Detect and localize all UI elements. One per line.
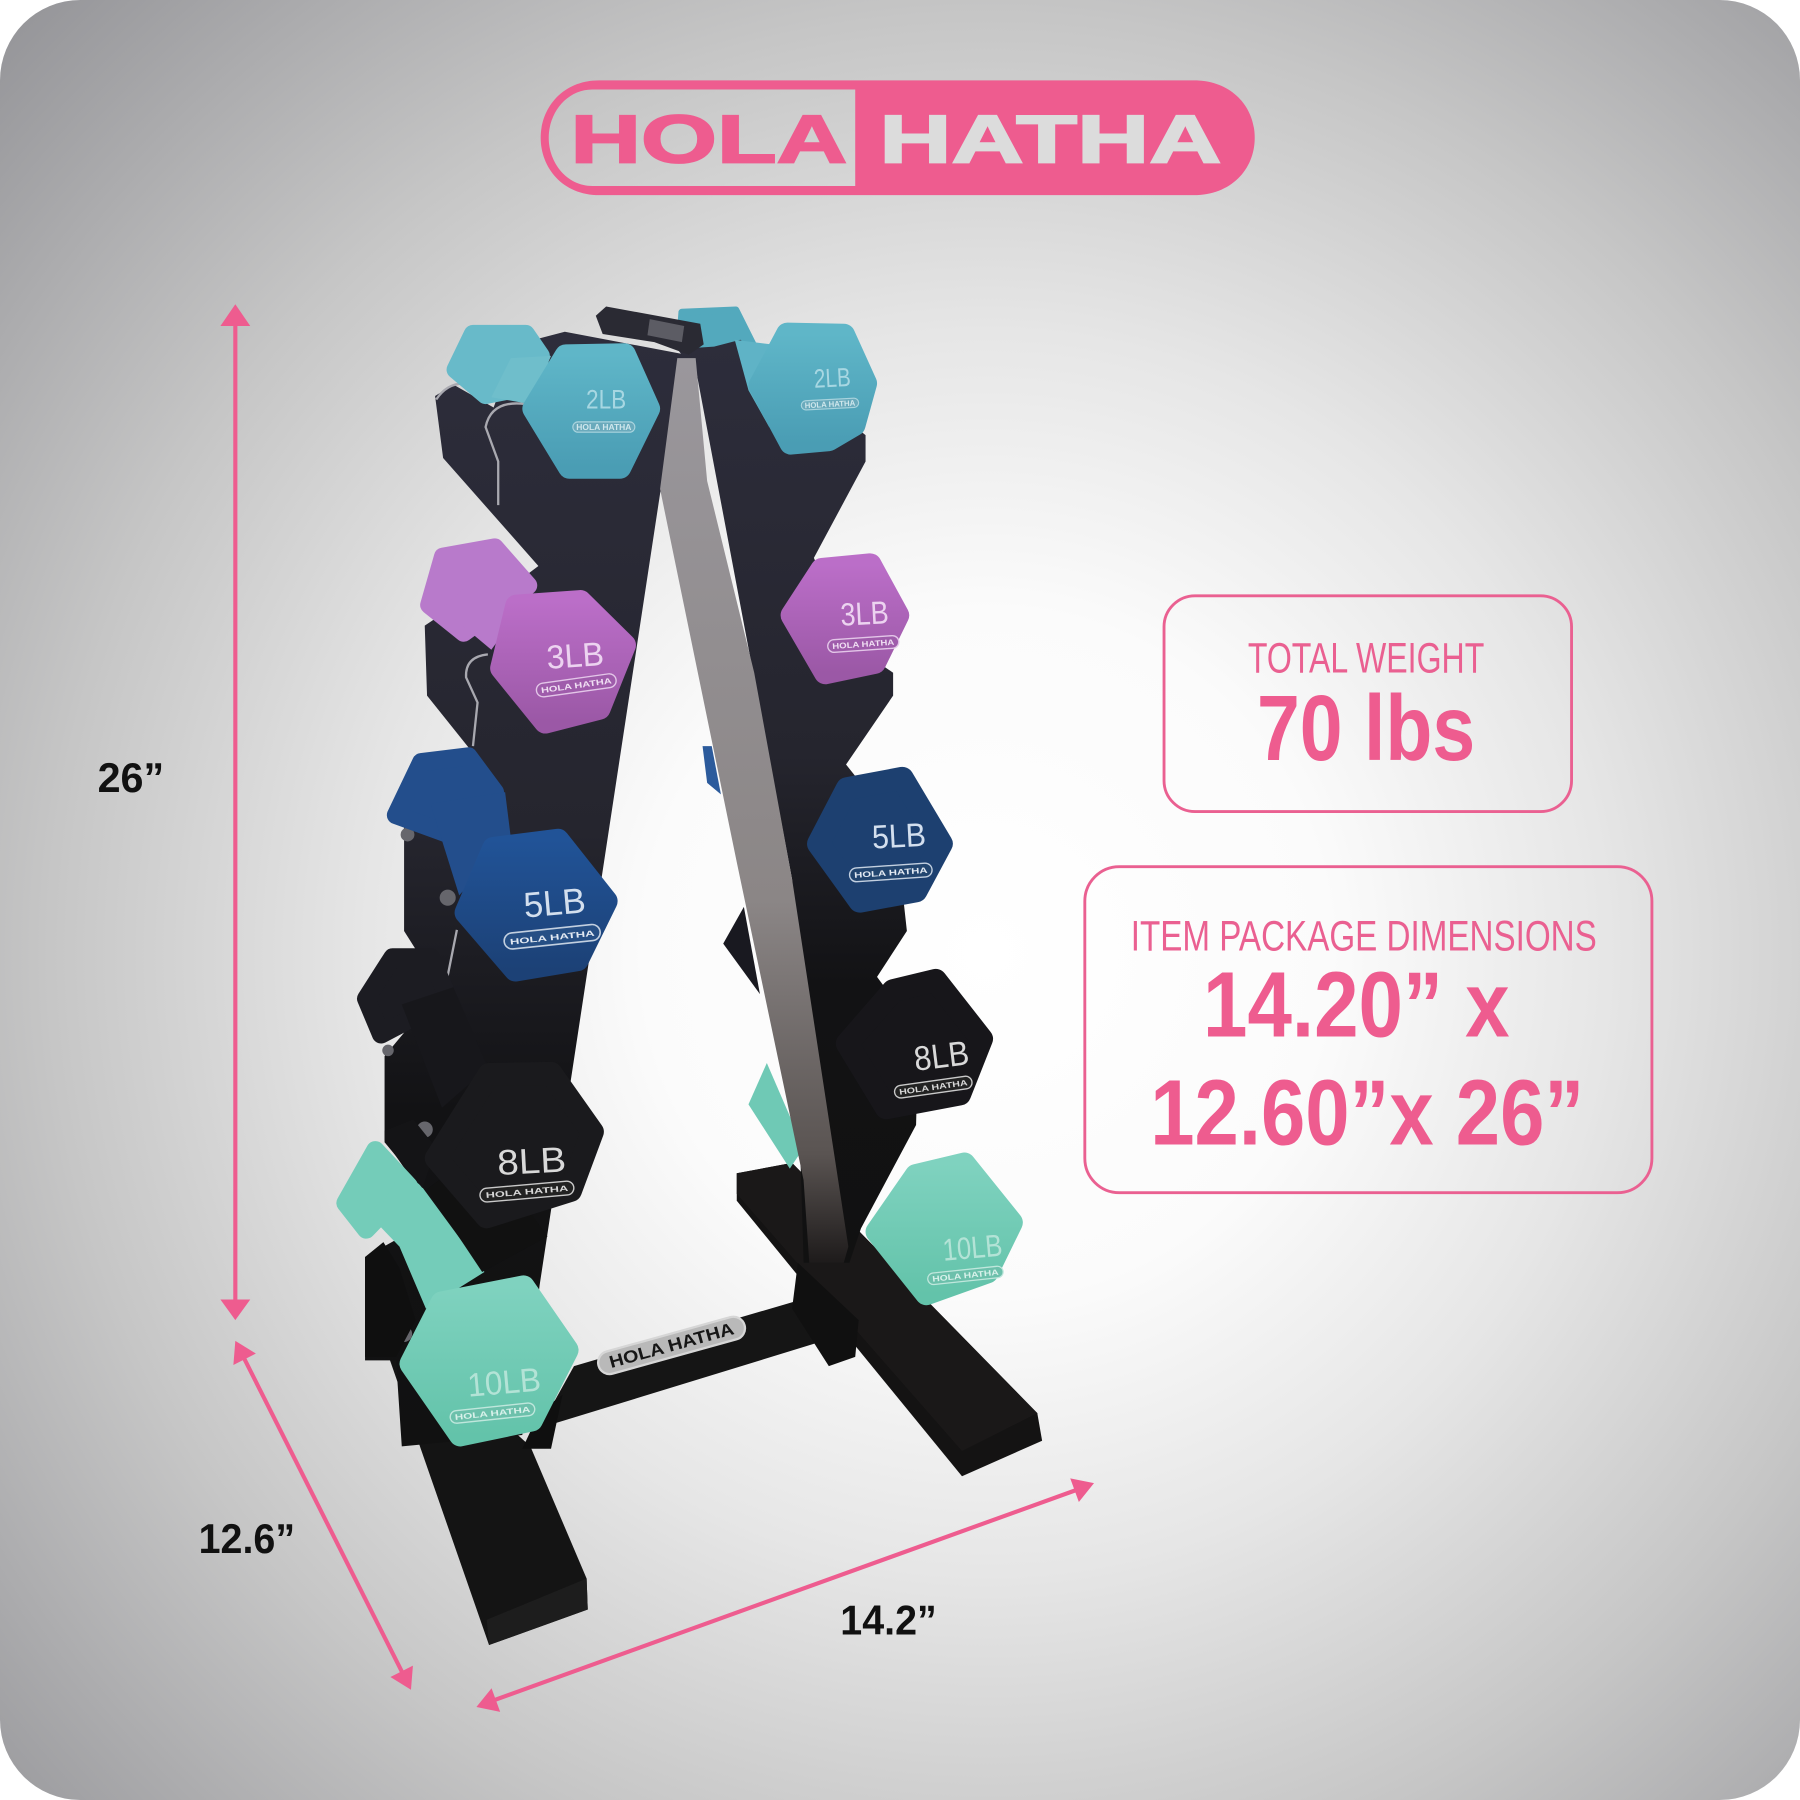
total weight heading: TOTAL WEIGHT	[1248, 635, 1484, 682]
dumbbell: 10LB left front bell: 10LB	[466, 1361, 542, 1405]
rear dumbbells peeking behind the plate	[681, 310, 804, 1169]
bar logo plate: HOLA HATHA	[607, 1318, 736, 1372]
logo: Hola Hatha	[541, 80, 1255, 195]
dumbbell: 10LB left front bell: HOLA HATHA	[454, 1405, 531, 1422]
logo: Hola Hatha: HATHA	[879, 102, 1221, 177]
dimensions value line one: 14.20” x	[1203, 953, 1510, 1057]
total weight value: 70 lbs	[1257, 676, 1475, 780]
dumbbell: 10LB right	[877, 1164, 1011, 1294]
dumbbell: 5LB right	[818, 778, 941, 901]
dumbbell: 10LB left rear bell and handle	[346, 1119, 548, 1357]
dumbbell rack illustration	[346, 307, 1042, 1645]
dumbbell: 3LB right: HOLA HATHA	[832, 638, 895, 651]
dumbbell: 8LB left: HOLA HATHA	[485, 1184, 569, 1200]
dumbbell: 8LB right: HOLA HATHA	[899, 1078, 968, 1097]
dumbbell: 5LB left: 5LB	[522, 880, 587, 926]
dumbbell: 3LB left: 3LB	[545, 636, 605, 677]
dumbbell: 8LB left	[366, 957, 592, 1217]
dumbbell: 3LB right	[792, 565, 899, 673]
label: 26 inch height: 26”	[98, 755, 164, 801]
label: 12.6 inch depth: 12.6”	[199, 1516, 295, 1562]
dumbbell: 2LB right: HOLA HATHA	[805, 399, 856, 410]
dumbbell: 5LB left: HOLA HATHA	[510, 929, 595, 947]
dumbbell: 3LB left: HOLA HATHA	[540, 676, 612, 695]
dumbbell: 5LB right: 5LB	[871, 817, 927, 857]
hook wires and pins	[382, 384, 526, 1342]
dumbbell: 5LB right: HOLA HATHA	[854, 866, 928, 880]
dumbbell: 2LB left	[456, 334, 649, 467]
arrow: width dimension	[476, 1478, 1094, 1712]
dimensions value line two: 12.60”x 26”	[1150, 1061, 1584, 1165]
dumbbell: 8LB left: 8LB	[496, 1139, 567, 1183]
dumbbell: 2LB left: HOLA HATHA	[576, 423, 632, 432]
dumbbell: 10LB right: HOLA HATHA	[932, 1268, 999, 1284]
panel: total weight	[1164, 596, 1572, 812]
dimensions heading: ITEM PACKAGE DIMENSIONS	[1131, 913, 1597, 960]
right rack upright	[677, 340, 918, 1263]
dumbbell: 2LB left: 2LB	[586, 385, 626, 415]
label: 14.2 inch width: 14.2”	[840, 1598, 937, 1644]
rack base	[388, 1163, 1042, 1645]
dumbbell: 8LB right: 8LB	[912, 1034, 971, 1079]
dumbbell: 3LB left	[429, 548, 624, 722]
arrow: height dimension	[220, 304, 250, 1320]
dumbbell: 10LB right: 10LB	[941, 1228, 1004, 1268]
centre steel plate	[660, 358, 848, 1263]
dumbbell: 3LB right: 3LB	[839, 594, 890, 633]
dumbbell: 10LB left front bell	[411, 1287, 567, 1435]
logo: Hola Hatha: HOLA	[571, 102, 847, 177]
arrow: depth dimension	[233, 1341, 413, 1690]
dumbbell: 2LB right: 2LB	[813, 362, 851, 394]
dumbbell: 5LB left	[396, 757, 606, 970]
dumbbell: 2LB right	[735, 334, 866, 443]
top clamp	[596, 307, 704, 355]
panel: item package dimensions	[1085, 867, 1652, 1193]
left rack upright	[365, 332, 686, 1446]
bar logo plate	[595, 1314, 748, 1377]
dumbbell: 8LB right	[847, 980, 982, 1108]
